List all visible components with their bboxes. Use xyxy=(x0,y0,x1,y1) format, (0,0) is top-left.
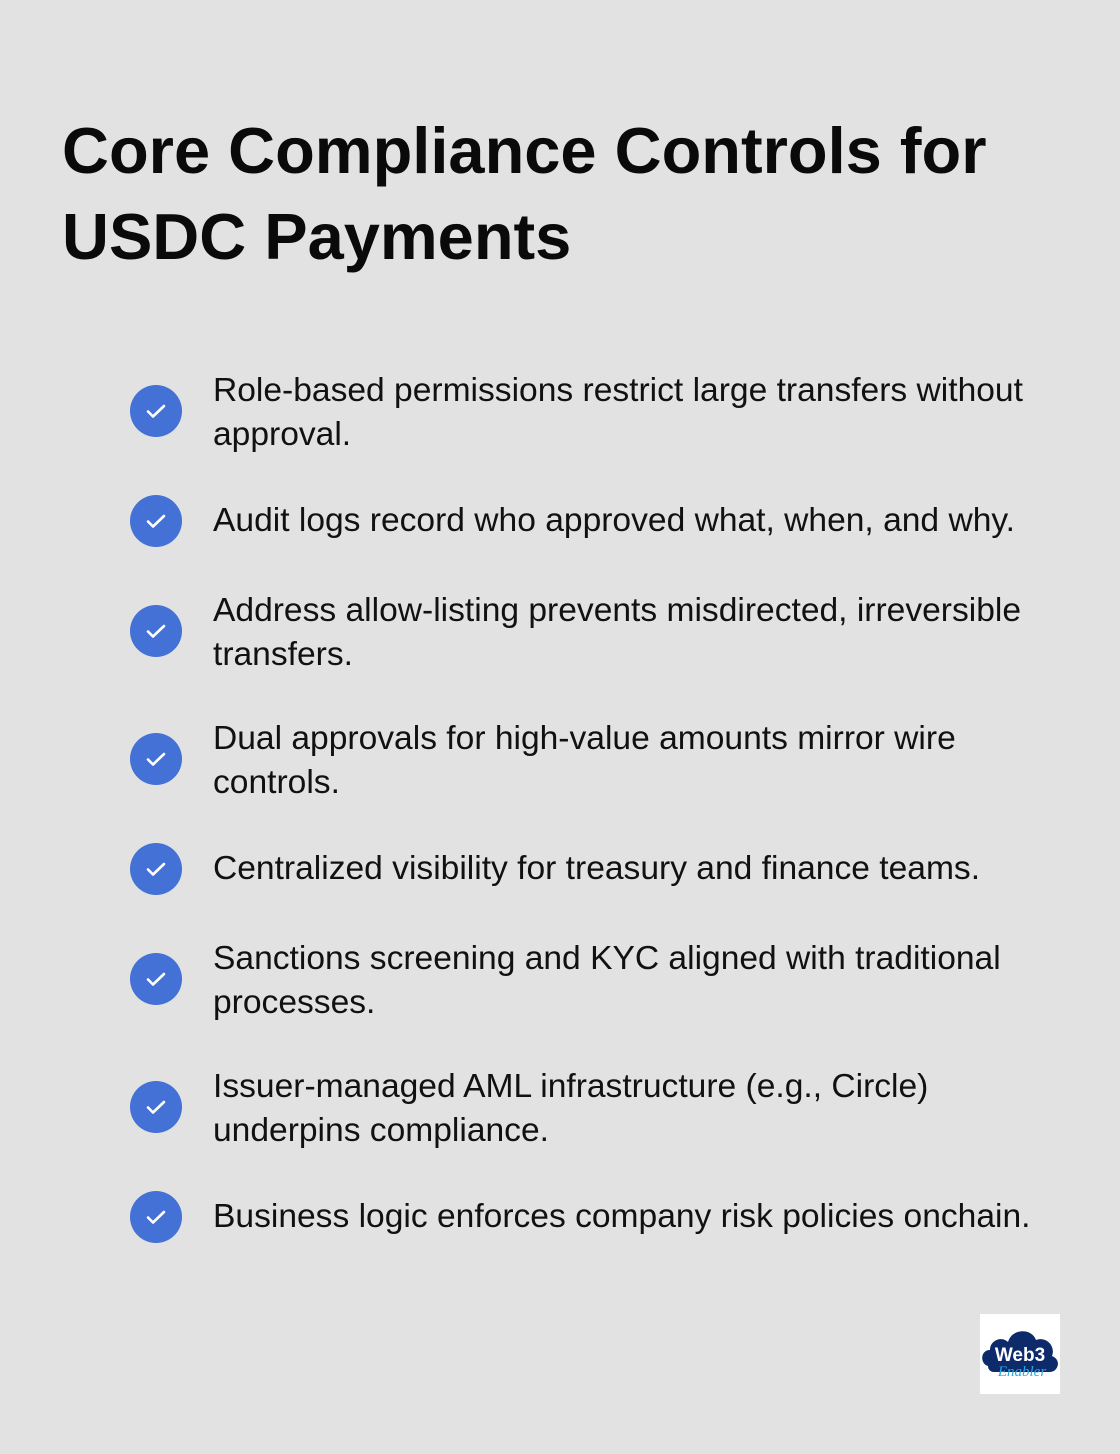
title: Core Compliance Controls for xyxy=(62,114,987,187)
title: USDC Payments xyxy=(62,200,571,273)
logo: Web3 Enabler: Web3 xyxy=(995,1345,1045,1366)
title xyxy=(62,114,987,273)
item 5 xyxy=(130,843,980,895)
item 8: Business logic enforces company risk policies onchain. xyxy=(213,1198,1030,1235)
logo: Web3 Enabler: Enabler xyxy=(997,1364,1046,1380)
item 1: approval. xyxy=(213,416,351,453)
item 6: Sanctions screening and KYC aligned with traditional xyxy=(213,940,1001,977)
item 4: Dual approvals for high-value amounts mirror wire xyxy=(213,720,956,757)
item 4: controls. xyxy=(213,764,340,801)
item 4 xyxy=(130,720,956,801)
item 8 xyxy=(130,1191,1030,1243)
logo: Web3 Enabler xyxy=(980,1314,1060,1394)
item 2 xyxy=(130,495,1015,547)
item 6: processes. xyxy=(213,984,375,1021)
item 2: Audit logs record who approved what, when, and why. xyxy=(213,502,1015,539)
item 7: underpins compliance. xyxy=(213,1112,549,1149)
item 1: Role-based permissions restrict large transfers without xyxy=(213,372,1023,409)
item 1 xyxy=(130,372,1023,453)
item 3: Address allow-listing prevents misdirected, irreversible xyxy=(213,592,1021,629)
item 6 xyxy=(130,940,1001,1021)
item 7 xyxy=(130,1068,928,1149)
item 3: transfers. xyxy=(213,636,353,673)
item 7: Issuer-managed AML infrastructure (e.g., Circle) xyxy=(213,1068,928,1105)
item 3 xyxy=(130,592,1021,673)
item 5: Centralized visibility for treasury and finance teams. xyxy=(213,850,980,887)
